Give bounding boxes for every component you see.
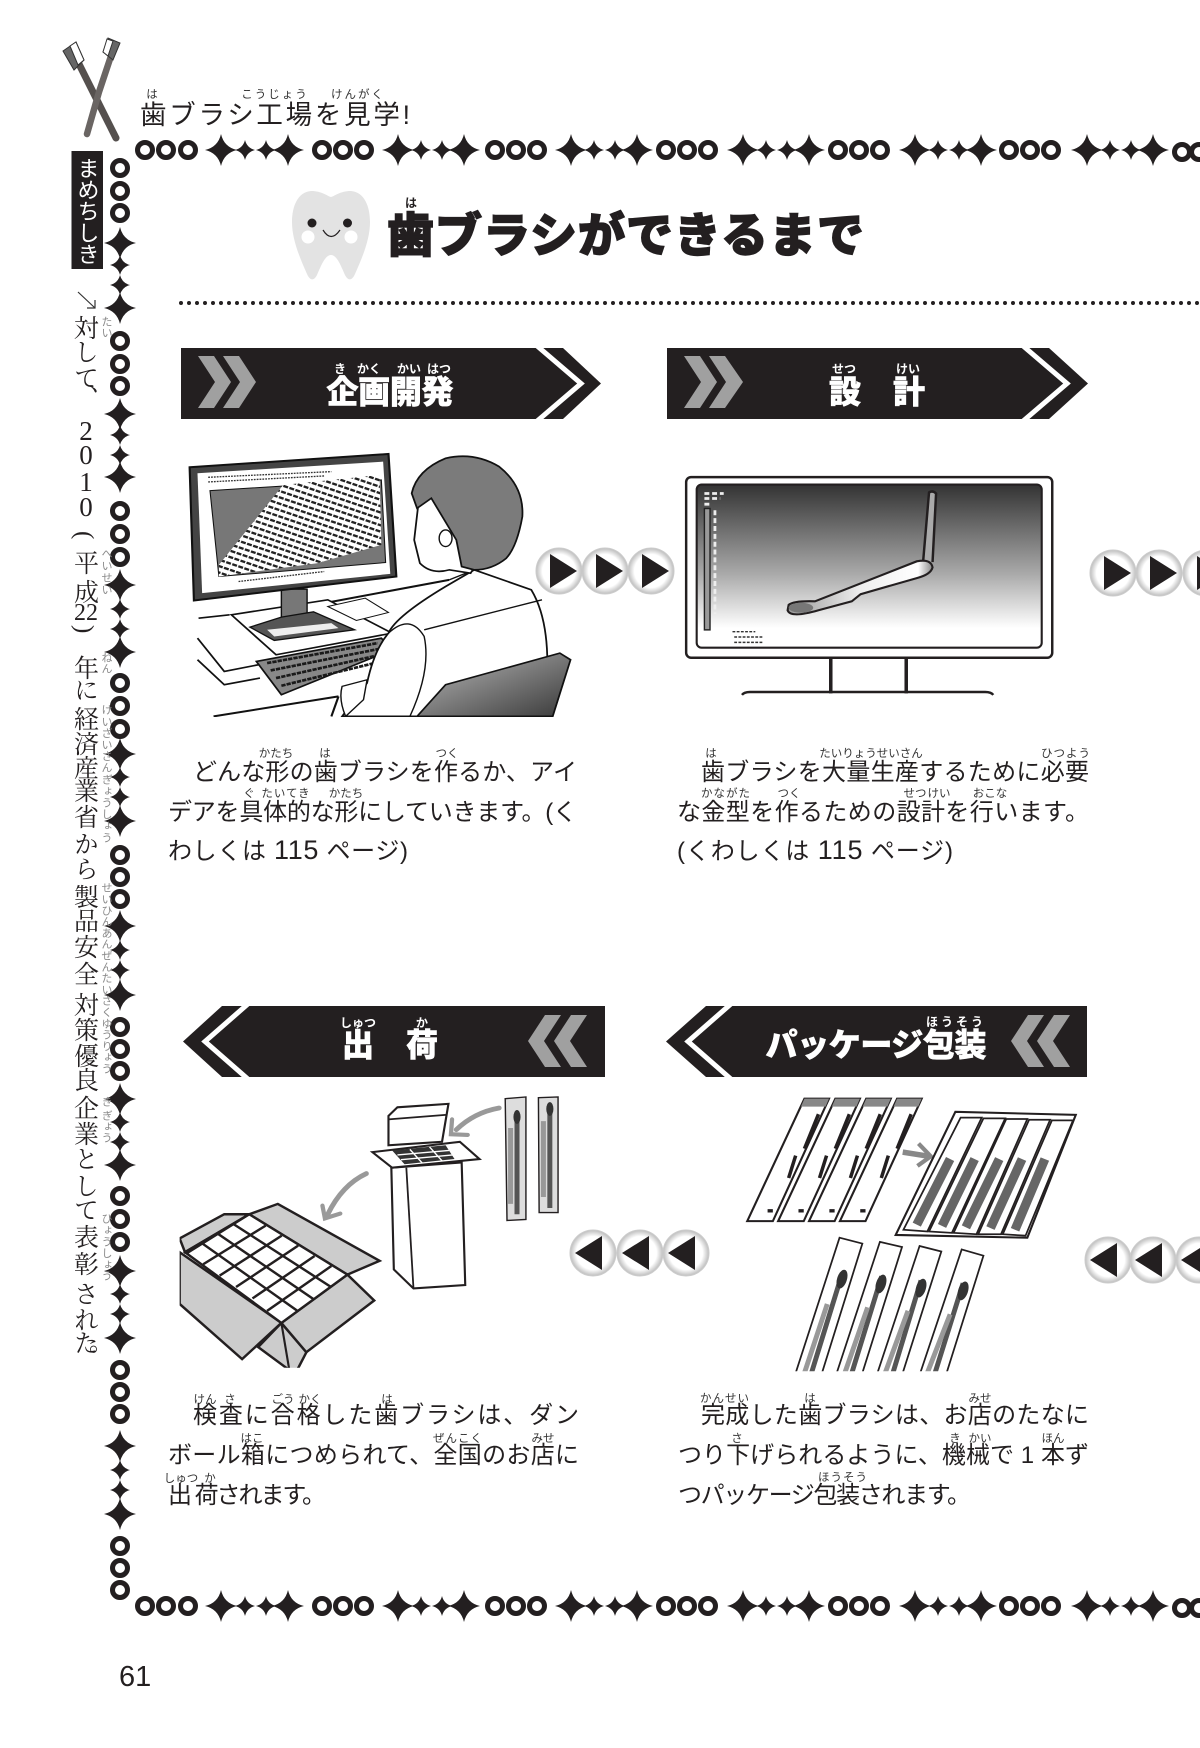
- step banner: design: [667, 345, 1088, 422]
- text block: shipping: さ: [224, 1393, 236, 1406]
- sidebar ruby annotations: けいざいさんぎょうしょう: [100, 704, 112, 843]
- text block: packaging: つパッケージ包装されます。: [678, 1482, 971, 1509]
- step banner: shipping: しゅつ: [340, 1016, 376, 1030]
- decorative frame: left border: [104, 160, 136, 1598]
- illustration: designer at computer: [190, 454, 571, 716]
- sidebar vertical text: 策: [70, 1017, 99, 1042]
- step banner: design: 設: [829, 374, 861, 410]
- sidebar vertical text: て: [70, 1197, 98, 1222]
- text block: planning: [168, 747, 577, 865]
- sidebar ruby annotations: ぎょう: [100, 1110, 112, 1143]
- sidebar vertical text: た: [70, 1330, 98, 1355]
- step banner: planning: [181, 345, 601, 422]
- flow arrows: packaging to shipping: [570, 1230, 709, 1276]
- text block: design: [677, 747, 1091, 865]
- step banner: shipping: [183, 1003, 605, 1080]
- section header: factory tour: 歯ブラシ工場を見学!: [140, 100, 410, 130]
- text block: packaging: き: [949, 1432, 961, 1445]
- sidebar ruby annotations: へいせい: [100, 548, 112, 596]
- sidebar vertical text: 0: [79, 492, 93, 522]
- sidebar vertical text: 0: [79, 440, 93, 470]
- main title: 歯ブラシができるまで: [387, 209, 864, 262]
- flow arrows: next to packaging: [1085, 1237, 1200, 1283]
- step banner: shipping: 出: [342, 1027, 374, 1063]
- text block: design: かながた: [701, 786, 751, 800]
- text block: design: は: [705, 747, 717, 760]
- text block: packaging: [678, 1392, 1089, 1509]
- text block: planning: たいてき: [261, 787, 311, 800]
- step banner: design: けい: [896, 362, 920, 376]
- step banner: planning: かい: [397, 362, 421, 376]
- text block: shipping: は: [381, 1393, 393, 1406]
- sidebar vertical text: 産: [70, 755, 99, 780]
- text block: design: けい: [928, 787, 950, 800]
- sidebar ruby annotations: き: [100, 1096, 112, 1107]
- text block: design: おこな: [973, 787, 1007, 800]
- sidebar vertical text: [70, 315, 99, 1369]
- sidebar vertical text: 企: [70, 1095, 99, 1120]
- step banner: planning: はつ: [427, 362, 451, 376]
- sidebar ruby annotations: せいひんあんぜんたいさくゆうりょう: [100, 882, 112, 1074]
- text block: shipping: ボール箱につめられて、全国のお店に: [168, 1442, 579, 1469]
- sidebar vertical text: 品: [70, 908, 98, 933]
- sidebar vertical text: (: [70, 531, 98, 539]
- sidebar vertical text: 表: [70, 1224, 99, 1249]
- sidebar vertical text: 2: [79, 416, 93, 446]
- sidebar vertical text: 1: [79, 467, 93, 497]
- illustration: boxes for shipping: [180, 1097, 558, 1370]
- text block: shipping: かく: [298, 1393, 322, 1406]
- section header: factory tour: こうじょう: [241, 88, 309, 101]
- flow arrows: design to next: [1090, 550, 1200, 596]
- sidebar vertical text: 平: [70, 550, 98, 575]
- text block: planning: ぐ: [243, 788, 255, 800]
- section header: factory tour: は: [146, 88, 158, 101]
- sidebar vertical text: に: [70, 677, 98, 702]
- icon: continuation arrow: [78, 292, 95, 308]
- text block: planning: かたち: [259, 747, 293, 760]
- sidebar vertical text: 業: [70, 778, 99, 803]
- step banner: shipping: 荷: [406, 1027, 438, 1063]
- icon: crossed toothbrushes: [63, 38, 120, 138]
- sidebar vertical text: と: [70, 1146, 98, 1171]
- text block: packaging: は: [804, 1392, 816, 1405]
- text block: design: たいりょうせいさん: [819, 747, 923, 760]
- text block: packaging: 完成した歯ブラシは、お店のたなに: [701, 1402, 1089, 1429]
- text block: planning: デアを具体的な形にしていきます。(く: [168, 799, 577, 826]
- text block: shipping: 検査に合格した歯ブラシは、ダン: [193, 1402, 579, 1429]
- icon: smiling tooth: [292, 191, 370, 279]
- text block: shipping: ぜんこく: [433, 1432, 483, 1445]
- sidebar vertical text: 良: [70, 1067, 98, 1092]
- sidebar vertical text: 。: [70, 1344, 98, 1369]
- step banner: shipping: か: [416, 1016, 428, 1030]
- text block: shipping: しゅつ: [164, 1472, 198, 1485]
- step banner: packaging: パッケージ包装: [766, 1027, 986, 1063]
- step banner: design: せつ: [832, 362, 856, 376]
- section header: factory tour: けんがく: [331, 87, 385, 101]
- text block: design: つく: [778, 788, 800, 800]
- text block: shipping: か: [204, 1472, 216, 1485]
- sidebar vertical text: 22: [74, 600, 98, 626]
- text block: planning: かたち: [329, 787, 363, 800]
- text block: design: せつ: [904, 787, 926, 800]
- illustration: CAD monitor with toothbrush: [686, 477, 1052, 695]
- sidebar vertical text: ら: [70, 856, 98, 881]
- dotted divider: [181, 301, 1200, 305]
- text block: packaging: かんせい: [700, 1392, 750, 1405]
- sidebar vertical text: て: [70, 365, 98, 390]
- sidebar vertical text: 業: [70, 1121, 99, 1146]
- sidebar vertical text: 対: [70, 315, 99, 340]
- sidebar vertical text: し: [70, 1173, 98, 1198]
- text block: design: (くわしくは 115 ページ): [677, 835, 953, 865]
- text block: planning: わしくは 115 ページ): [168, 835, 408, 865]
- sidebar label: trivia: まめちしき: [74, 157, 100, 264]
- sidebar vertical text: 対: [70, 992, 99, 1017]
- text block: shipping: ごう: [272, 1392, 294, 1406]
- sidebar vertical text: 優: [70, 1043, 99, 1068]
- sidebar ruby annotations: たい: [100, 316, 112, 338]
- section header: factory tour: [140, 87, 410, 130]
- text block: design: 歯ブラシを大量生産するために必要: [701, 759, 1089, 786]
- sidebar vertical text: 安: [70, 934, 99, 960]
- flow arrows: planning to design: [536, 548, 674, 594]
- sidebar vertical text: か: [70, 831, 98, 856]
- text block: packaging: さ: [731, 1432, 743, 1445]
- text block: shipping: けん: [194, 1393, 216, 1406]
- sidebar vertical text: 全: [70, 961, 99, 986]
- illustration: toothbrush packaging: [747, 1099, 1076, 1373]
- main title: は: [405, 196, 417, 210]
- sidebar vertical text: さ: [70, 1281, 98, 1306]
- decorative frame: bottom border: [138, 1590, 1200, 1622]
- step banner: planning: かく: [357, 362, 381, 376]
- text block: shipping: はこ: [240, 1432, 264, 1445]
- text block: packaging: みせ: [968, 1392, 992, 1405]
- text block: shipping: みせ: [532, 1432, 554, 1445]
- text block: design: な金型を作るための設計を行います。: [677, 799, 1089, 826]
- sidebar vertical text: 年: [70, 655, 99, 680]
- text block: packaging: つり下げられるように、機械で 1 本ず: [678, 1442, 1089, 1469]
- text block: planning: つく: [436, 748, 458, 760]
- step banner: planning: 企画開発: [326, 374, 454, 410]
- text block: shipping: [164, 1392, 579, 1509]
- text block: packaging: かい: [968, 1432, 992, 1445]
- sidebar ruby annotations: [100, 316, 112, 1281]
- step banner: design: 計: [893, 374, 925, 410]
- text block: design: ひつよう: [1041, 747, 1091, 760]
- sidebar ruby annotations: ひょうしょう: [100, 1213, 112, 1281]
- decorative frame: top border: [138, 134, 1200, 166]
- page number: 61: [119, 1661, 151, 1693]
- sidebar vertical text: し: [70, 339, 98, 364]
- step banner: packaging: ほうそう: [926, 1015, 986, 1029]
- text block: packaging: ほうそう: [818, 1471, 868, 1484]
- sidebar vertical text: 成: [70, 579, 99, 604]
- sidebar vertical text: 省: [70, 804, 99, 829]
- sidebar vertical text: 彰: [70, 1251, 99, 1276]
- sidebar vertical text: 、: [70, 385, 98, 410]
- sidebar vertical text: れ: [70, 1307, 98, 1332]
- text block: shipping: 出 荷されます。: [168, 1482, 326, 1509]
- sidebar vertical text: 製: [70, 884, 99, 909]
- step banner: planning: き: [334, 362, 346, 376]
- text block: packaging: ほん: [1042, 1432, 1064, 1445]
- step banner: packaging: [666, 1003, 1087, 1080]
- sidebar vertical text: 済: [70, 731, 99, 756]
- sidebar vertical text: 経: [70, 706, 99, 731]
- text block: planning: どんな形の歯ブラシを作るか、アイ: [193, 759, 577, 786]
- text block: planning: は: [319, 747, 331, 760]
- sidebar ruby annotations: ねん: [100, 652, 112, 674]
- sidebar vertical text: ): [70, 625, 98, 633]
